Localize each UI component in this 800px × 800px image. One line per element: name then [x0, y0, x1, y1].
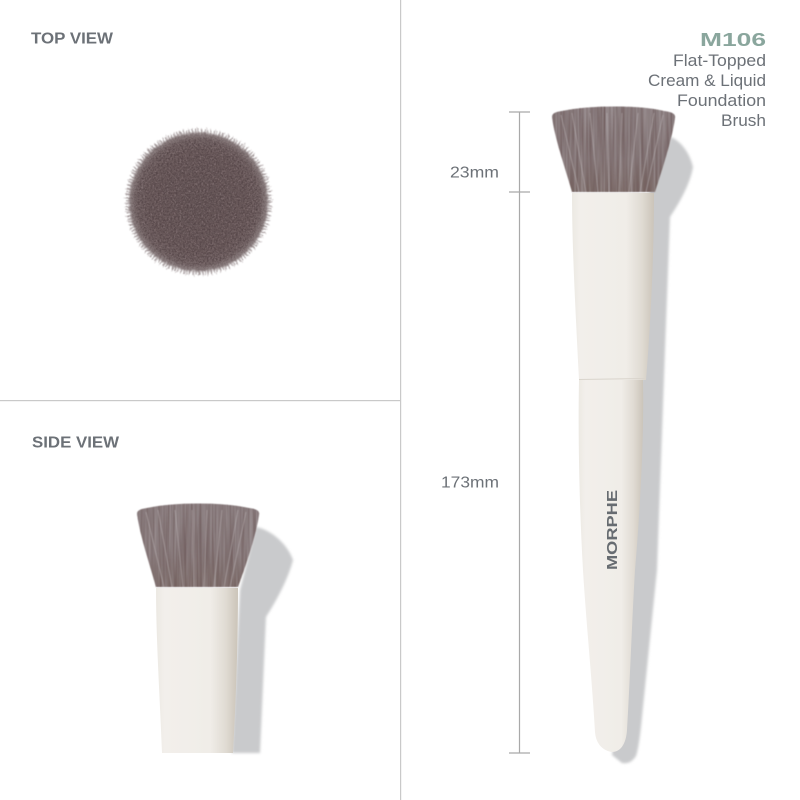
image: brush side view [130, 498, 293, 753]
product name: Flat-Topped [673, 51, 766, 70]
image: brush top view [126, 130, 270, 274]
ferrule seam [579, 378, 645, 380]
ferrule [572, 193, 654, 380]
ferrule: side view [156, 588, 238, 753]
product title [648, 30, 766, 130]
brand name: MORPHE [605, 490, 621, 570]
product name: Brush [721, 111, 766, 130]
dimension scale [441, 112, 530, 753]
shadow: side view brush [232, 527, 293, 753]
label: handle length: 173mm [441, 474, 499, 492]
product code: M106 [700, 30, 766, 50]
image: full brush [545, 103, 693, 763]
heading: top view: TOP VIEW [31, 30, 114, 48]
product name: Foundation [677, 91, 766, 110]
bristles [551, 106, 676, 193]
heading: side view: SIDE VIEW [32, 434, 120, 452]
handle [579, 380, 643, 752]
bristles: side view [136, 502, 260, 588]
label: bristle length: 23mm [450, 164, 499, 182]
product name [648, 51, 766, 130]
product name: Cream & Liquid [648, 71, 766, 90]
shadow: full brush [612, 137, 693, 763]
